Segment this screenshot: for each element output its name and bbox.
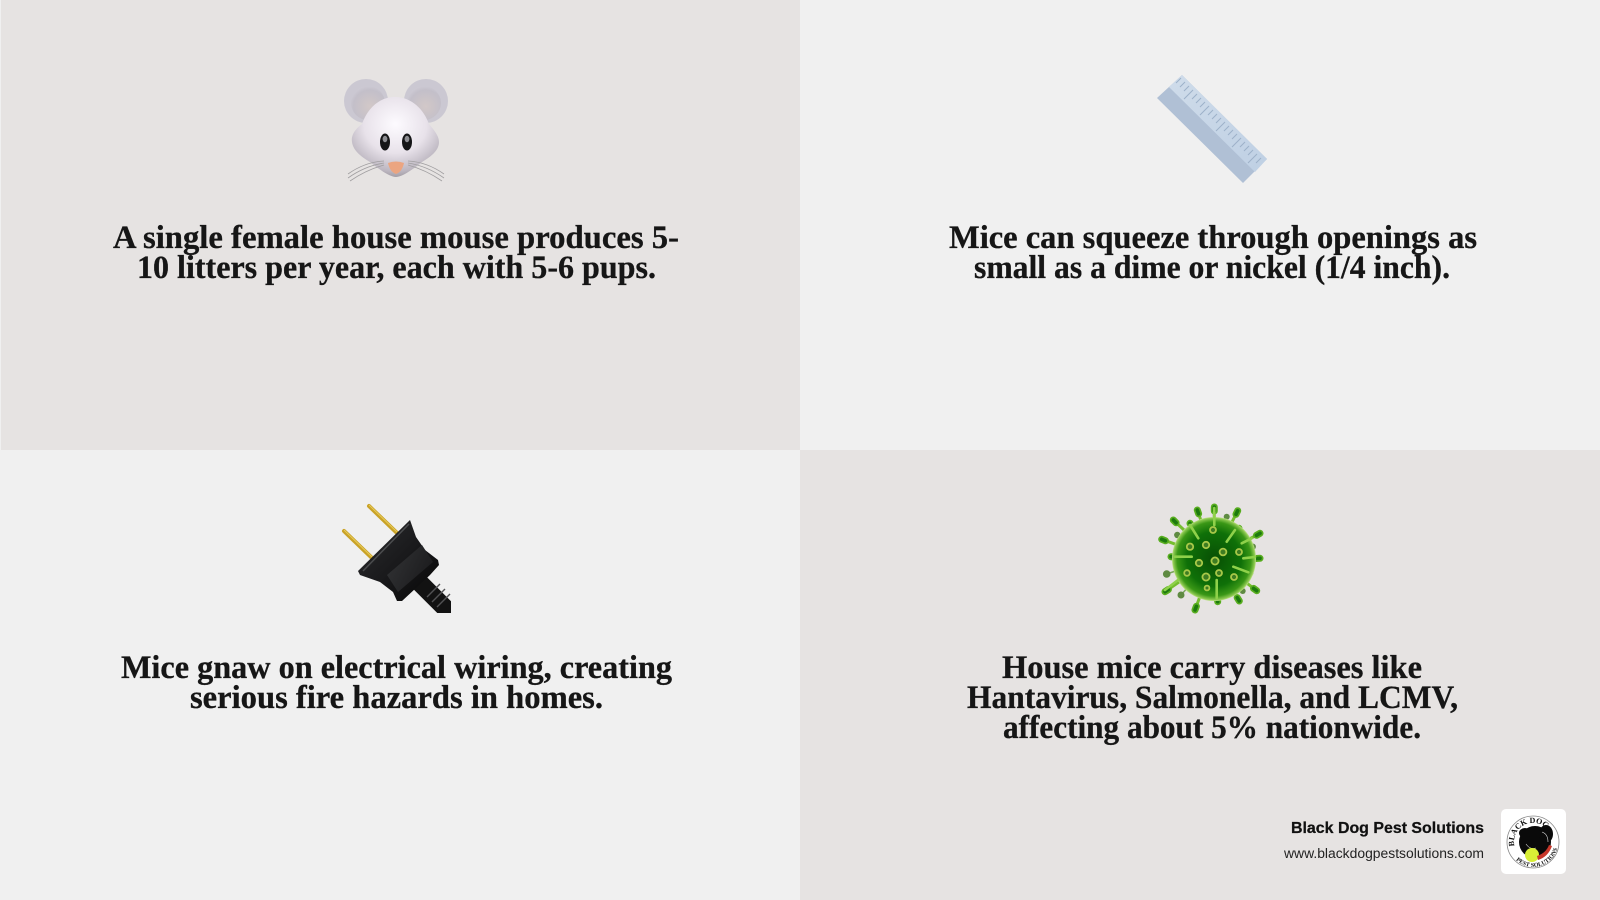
panel: electrical wiring [121,504,672,708]
heading: wiring fact [121,650,672,716]
heading: openings fact [949,220,1477,286]
heading: diseases fact: Hantavirus, Salmonella, and LCMV, [967,680,1458,716]
heading: diseases fact: affecting about 5% nationwide. [1003,710,1421,746]
heading: litters fact [113,220,679,286]
heading: openings fact: Mice can squeeze through openings as [949,220,1477,256]
heading: diseases fact: House mice carry diseases like [1002,650,1422,686]
icon: virus [1162,507,1260,610]
panel: small openings [800,0,1600,450]
logo: BLACK DOG [1508,818,1549,846]
heading: litters fact: A single female house mouse produces 5- [113,220,679,256]
icon: ruler [1157,75,1267,183]
panel: litters [1,0,800,450]
logo [1501,809,1566,874]
heading: openings fact: small as a dime or nickel (1/4 inch). [974,250,1450,286]
brand website: www.blackdogpestsolutions.com [1283,846,1484,861]
icon: mouse face [344,79,448,181]
heading: diseases fact [967,650,1458,746]
panel: diseases [800,450,1600,900]
heading: wiring fact: serious fire hazards in homes. [190,680,603,716]
icon: plug [342,504,451,613]
heading: wiring fact: Mice gnaw on electrical wiring, creating [121,650,672,686]
logo: PEST SOLUTIONS [1516,848,1558,867]
heading: litters fact: 10 litters per year, each with 5-6 pups. [137,250,656,286]
brand name: Black Dog Pest Solutions [1291,820,1484,837]
